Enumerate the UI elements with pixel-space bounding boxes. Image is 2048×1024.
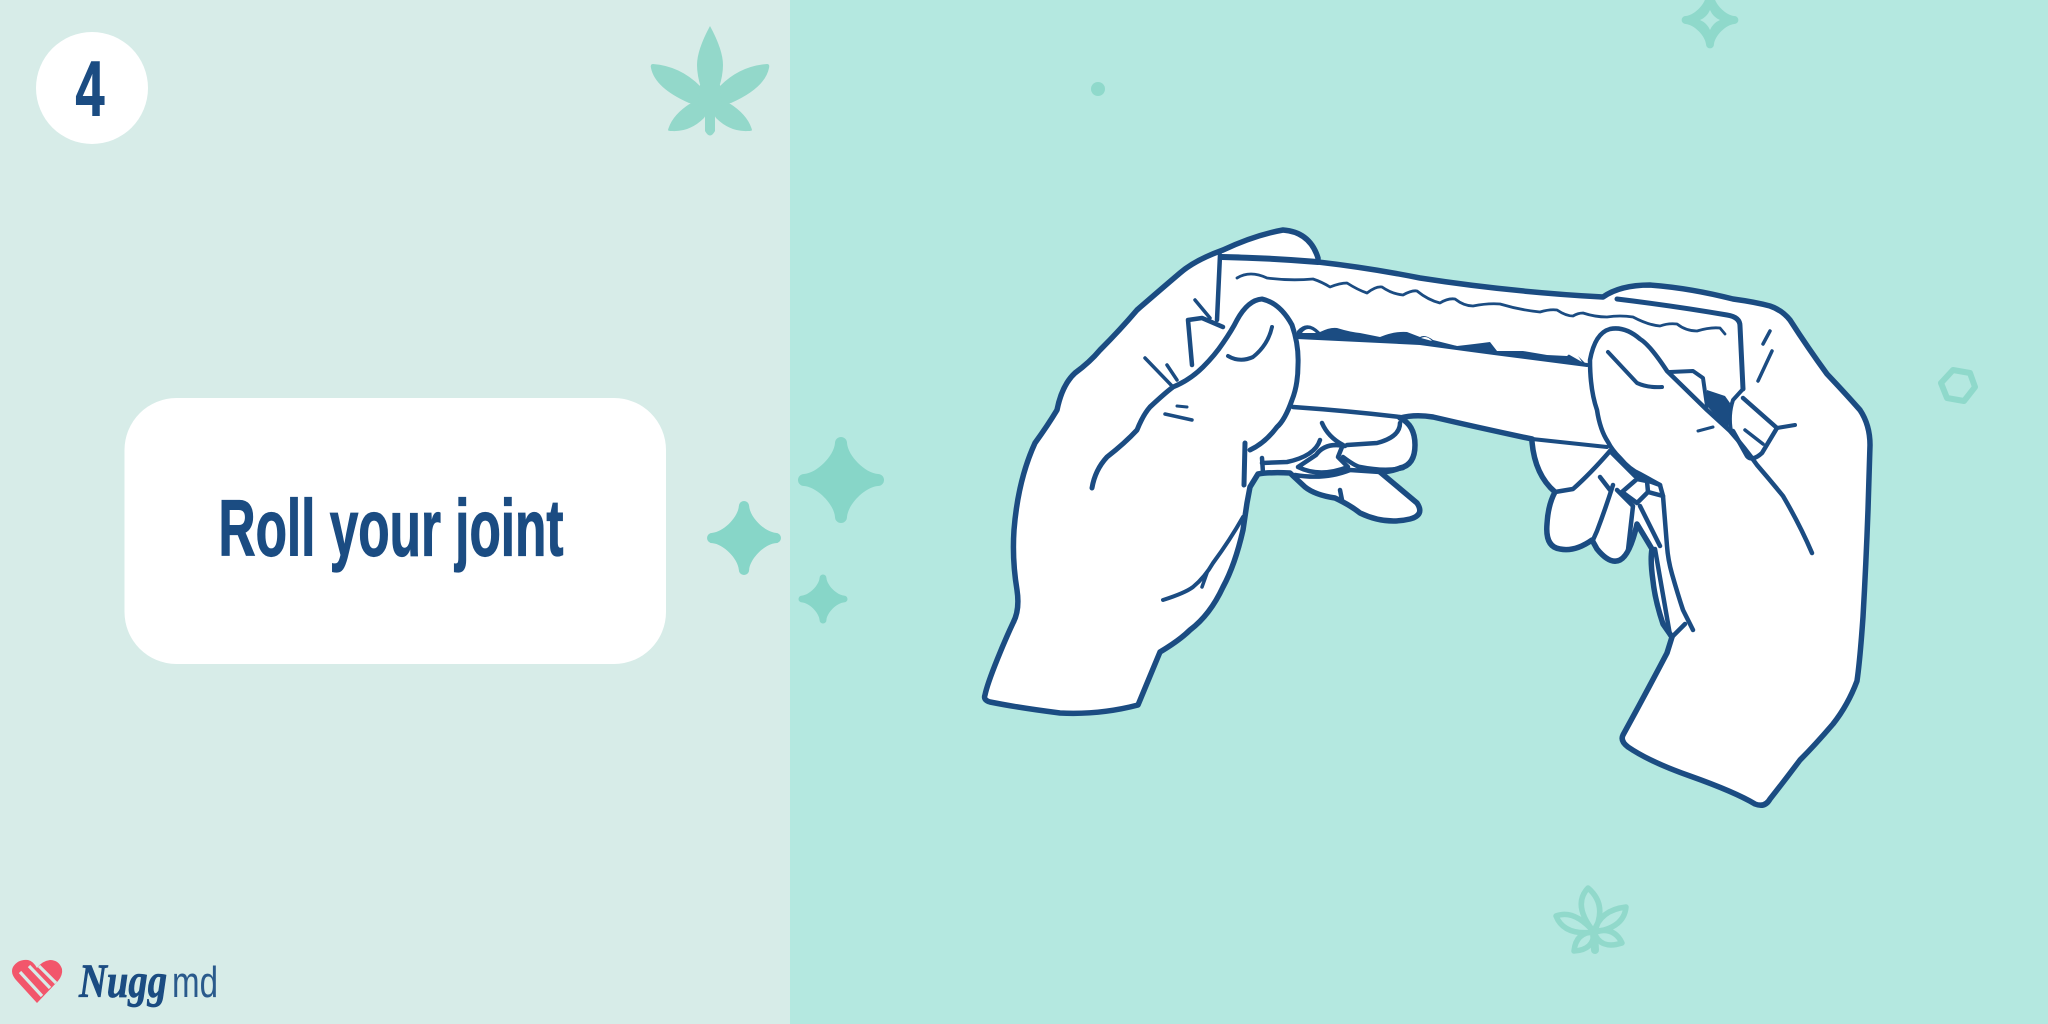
callout: text card (124, 398, 666, 664)
icon: sparkle large (798, 437, 884, 523)
step number badge: 4 (76, 44, 104, 132)
icon: outlined cannabis leaf (1556, 888, 1626, 951)
left hand thumb and creases (1092, 299, 1298, 600)
icon: sparkle medium (707, 501, 781, 575)
tobacco fill line (1297, 325, 1587, 365)
logo suffix: md (172, 958, 218, 1007)
step number badge (36, 32, 148, 144)
right hand fingers (1555, 451, 1685, 637)
icon: outlined sparkle top (1682, 0, 1738, 48)
illustration: hands rolling a joint (985, 230, 1870, 805)
icon: small dot (1091, 82, 1105, 96)
icon: logo heart (12, 960, 62, 1003)
dark shadow wedge (1707, 390, 1730, 430)
left hand fingers (1262, 423, 1403, 500)
panel: left background (0, 0, 790, 1024)
logo wordmark: Nugg (78, 955, 167, 1008)
icon: sparkle small (798, 574, 848, 624)
logo: Nugg md (12, 955, 218, 1008)
right hand thumb and creases (1590, 328, 1812, 630)
hands and paper silhouette (985, 230, 1870, 805)
callout: text card: Roll your joint (218, 484, 564, 572)
paper edges (1217, 255, 1743, 447)
icon: solid cannabis leaf (651, 26, 769, 136)
icon: hexagon outline (1941, 370, 1975, 401)
panel: right background (790, 0, 2048, 1024)
